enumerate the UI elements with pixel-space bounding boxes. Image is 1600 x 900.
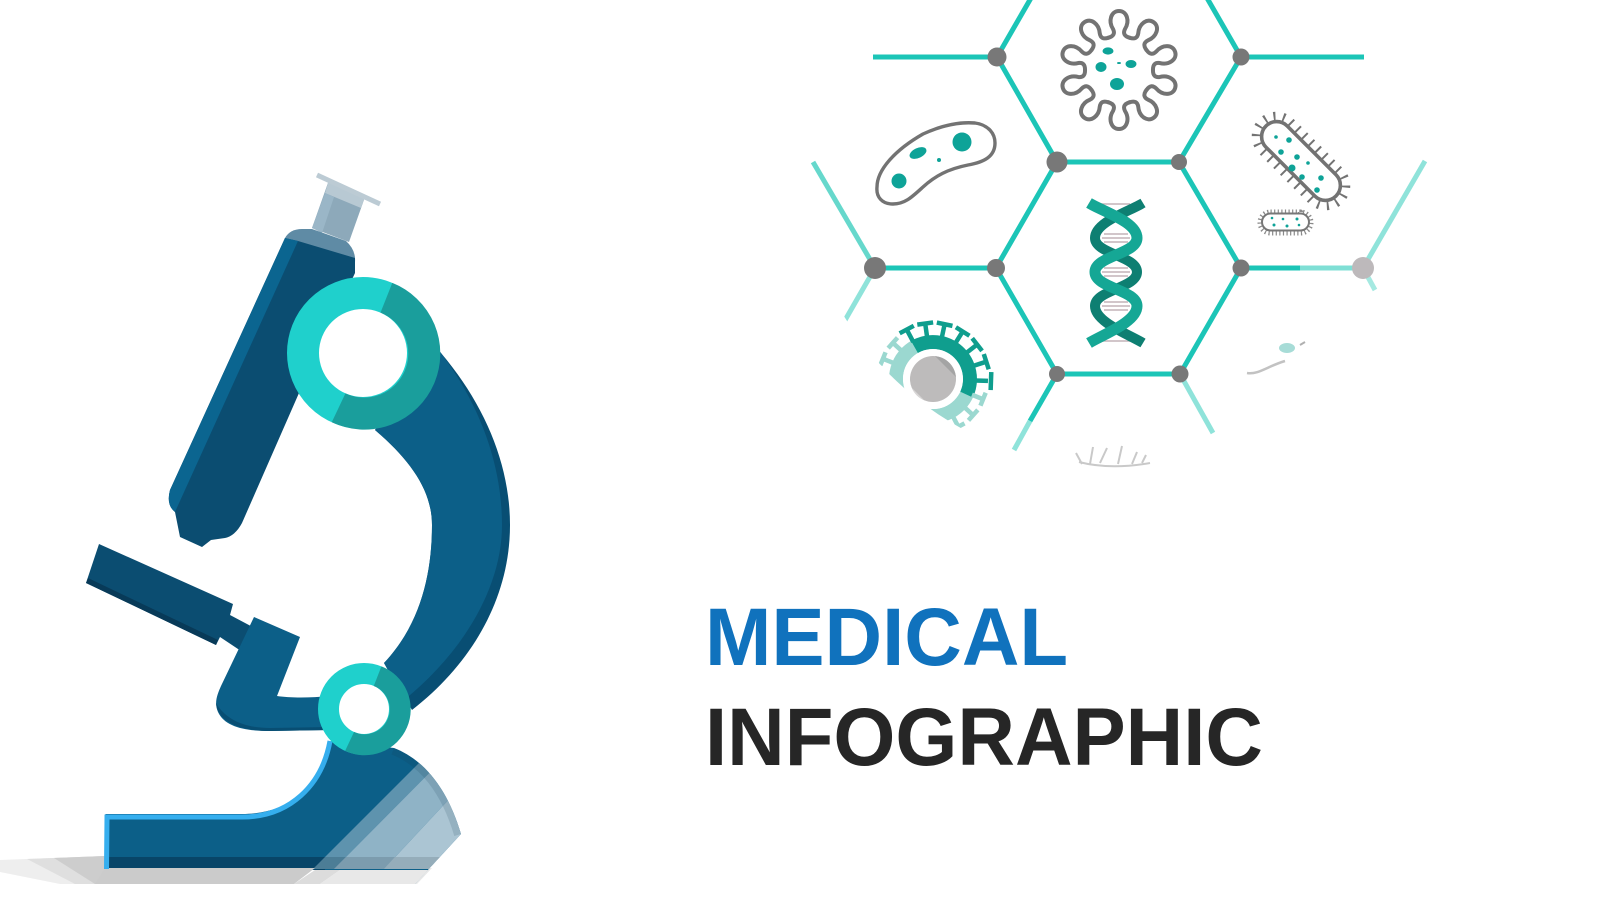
icon: rod bacterium: [1252, 112, 1350, 210]
title line: MEDICAL: MEDICAL: [705, 592, 1068, 683]
objective lens: [86, 544, 262, 657]
icon: DNA helix: [1089, 203, 1143, 343]
hexagon network: [813, 0, 1425, 466]
DNA base pairs: [1100, 204, 1130, 341]
eyepiece: [312, 175, 380, 242]
icon: faded bacterium: [1247, 342, 1305, 373]
light strand: [1089, 203, 1137, 343]
title line: INFOGRAPHIC: INFOGRAPHIC: [705, 692, 1263, 783]
stage: [216, 617, 330, 731]
small focus ring: [328, 674, 400, 745]
ground shadow: [0, 856, 432, 884]
title: [705, 592, 1263, 783]
large focus ring: [303, 293, 424, 414]
icon: bean bacterium: [877, 123, 995, 204]
icon: flower virus: [1060, 11, 1178, 129]
hexagon nodes: [864, 48, 1374, 382]
dark strand: [1095, 203, 1143, 343]
microscope: [0, 175, 510, 895]
hexagon lines: [813, 0, 1425, 450]
icon: small bacterium: [1260, 212, 1311, 233]
base: [104, 740, 461, 884]
virus spikes: [879, 322, 991, 430]
curved arm: [375, 340, 510, 710]
icon: faded cell: [1076, 446, 1150, 466]
icon: corona virus: [879, 322, 991, 430]
body tube: [169, 229, 355, 547]
